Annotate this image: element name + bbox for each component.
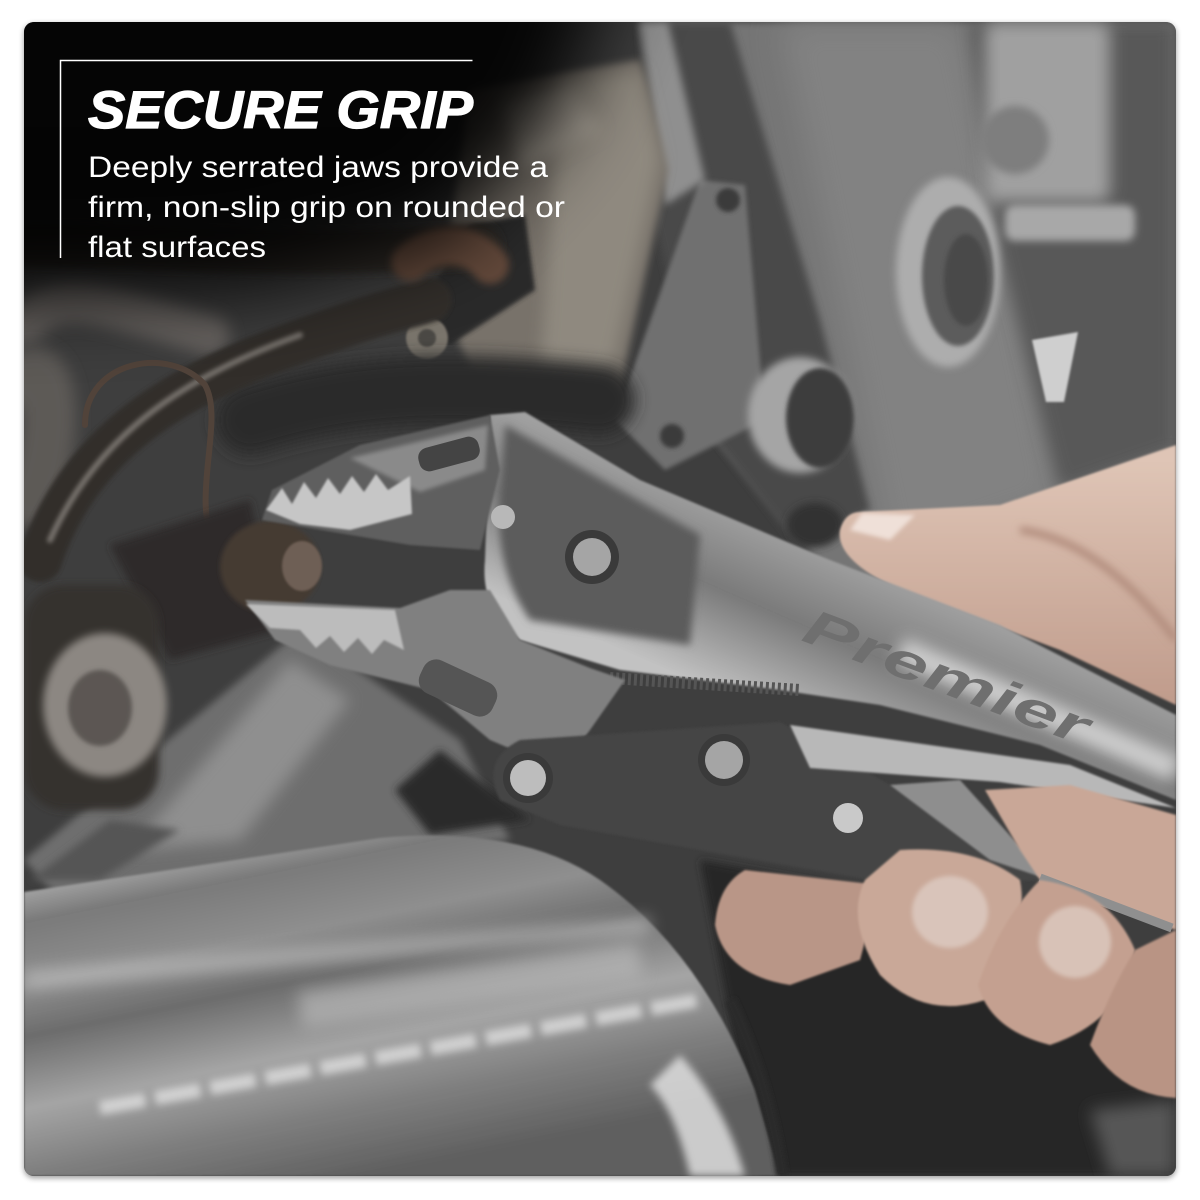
pliers tail xyxy=(1040,878,1172,928)
thumb and palm xyxy=(840,445,1176,705)
description text: flat surfaces xyxy=(88,231,266,264)
title: SECURE GRIP xyxy=(88,81,474,140)
hole in plate xyxy=(896,177,1000,367)
lower teeth xyxy=(246,604,404,654)
middle finger xyxy=(858,849,1022,1006)
rusty nut gripped by jaws xyxy=(110,500,322,660)
text frame lines xyxy=(60,60,472,258)
bolt on plate xyxy=(748,357,854,547)
palm below handle xyxy=(985,785,1176,930)
hoses and pipes, left xyxy=(24,245,600,560)
engine plate, upper right xyxy=(615,22,1176,600)
logo: Premier: Premier xyxy=(796,598,1101,757)
bolt, far left xyxy=(24,585,167,810)
description text: firm, non-slip grip on rounded or xyxy=(88,191,565,224)
description text xyxy=(88,151,565,264)
upper teeth xyxy=(266,474,412,530)
ring finger xyxy=(978,880,1135,1045)
silver strut, lower left xyxy=(24,630,530,900)
dark lower area xyxy=(700,860,1176,1176)
brass bracket, upper centre xyxy=(406,60,668,410)
pliers spring xyxy=(610,678,800,690)
dark gradient behind text xyxy=(0,0,640,300)
index finger xyxy=(715,870,880,985)
little finger xyxy=(1090,930,1176,1098)
description text: Deeply serrated jaws provide a xyxy=(88,151,548,184)
pliers lower handle xyxy=(493,722,1176,885)
chrome exhaust muffler xyxy=(24,836,782,1176)
pliers lower jaw xyxy=(244,589,626,748)
fingers xyxy=(715,785,1176,1098)
pliers upper jaw and handle xyxy=(262,412,1176,800)
